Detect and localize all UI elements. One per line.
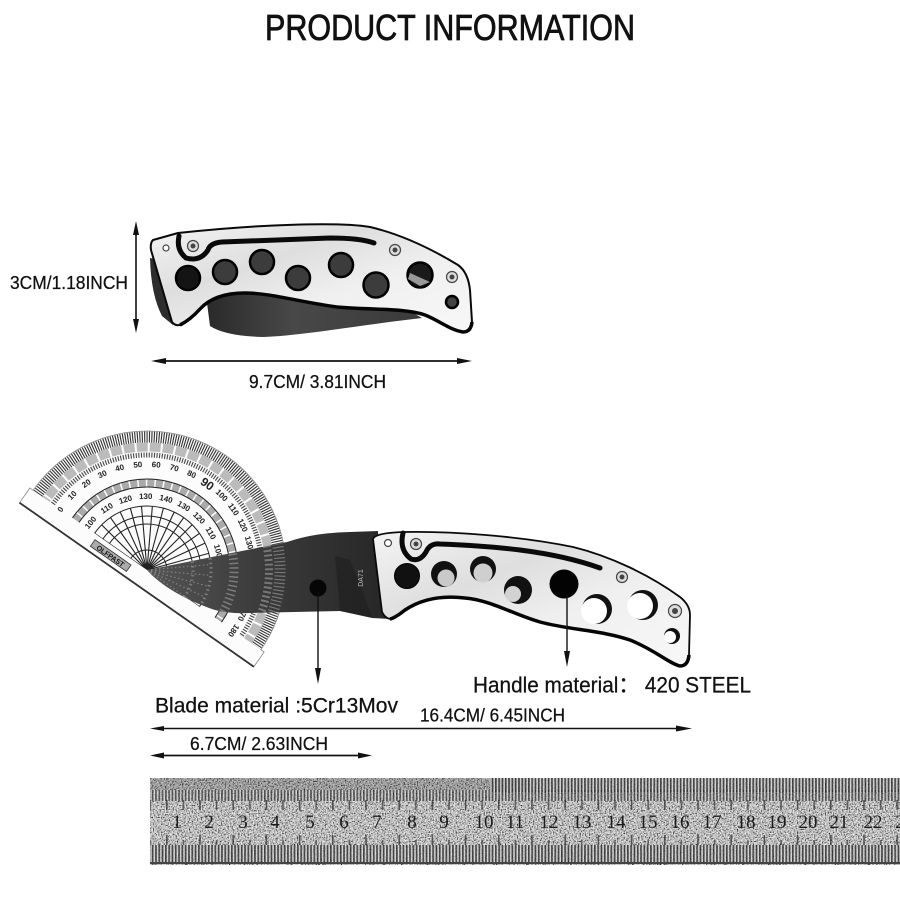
ruler bottom edge — [150, 862, 900, 864]
protractor outer numbers: 110 — [226, 502, 241, 518]
protractor body — [20, 374, 344, 667]
protractor outer numbers: 30 — [96, 468, 109, 480]
ruler numbers: 16 — [670, 812, 690, 833]
ruler center light tint — [150, 800, 900, 844]
folded blade spine sliver — [150, 258, 178, 325]
protractor outer numbers: 70 — [169, 463, 180, 474]
blade material label: Blade material :5Cr13Mov — [155, 694, 398, 718]
ruler numbers: 9 — [439, 812, 449, 833]
ruler numbers: 15 — [638, 812, 658, 833]
ruler numbers: 17 — [702, 812, 722, 833]
protractor brand label: OLFPAST — [95, 545, 126, 569]
opened handle lower black edge — [390, 597, 689, 666]
opened handle slot — [402, 533, 600, 568]
ruler centimetre marks top — [150, 800, 900, 810]
ruler numbers: 1 — [172, 812, 182, 833]
protractor outer numbers: 120 — [236, 517, 250, 534]
protractor inner numbers: 110 — [204, 525, 218, 542]
ruler numbers: 5 — [305, 812, 315, 833]
ruler noise surface — [150, 778, 900, 865]
protractor outer numbers — [53, 415, 301, 639]
width arrow — [151, 358, 472, 364]
overall length arrow — [150, 726, 692, 732]
ruler numbers: 14 — [606, 812, 626, 833]
protractor outer numbers: 0 — [56, 505, 66, 514]
protractor outer numbers: 60 — [151, 460, 162, 470]
opened handle screw heads — [414, 542, 678, 614]
handle pointer arrow — [564, 595, 570, 667]
protractor inner numbers — [83, 461, 247, 609]
opened handle screws — [384, 538, 682, 618]
protractor inner numbers: 110 — [99, 501, 115, 516]
opened blade — [147, 531, 390, 619]
ruler numbers: 20 — [798, 812, 818, 833]
ruler numbers: 8 — [407, 812, 417, 833]
protractor outer numbers: 10 — [66, 489, 79, 502]
protractor outer numbers: 100 — [214, 487, 230, 504]
ruler numbers: 12 — [540, 812, 558, 833]
blade marking: DA71 — [358, 569, 365, 587]
protractor showing through blade — [147, 543, 286, 613]
protractor inner numbers: 120 — [191, 510, 207, 526]
ruler numbers: 2 — [204, 812, 214, 833]
folded handle holes — [176, 250, 458, 308]
title: PRODUCT INFORMATION — [265, 7, 635, 48]
protractor outer numbers: 130 — [243, 535, 255, 551]
protractor outer numbers: 90 — [198, 474, 217, 494]
folded handle reflection — [408, 273, 430, 286]
protractor inner numbers: 100 — [83, 514, 99, 531]
protractor inner numbers: 130 — [139, 492, 153, 501]
middle scale ring — [72, 480, 236, 622]
ruler top shading — [150, 778, 530, 790]
ruler numbers: 6 — [339, 812, 349, 833]
folded handle slot — [178, 236, 374, 259]
ruler numbers: 3 — [238, 812, 248, 833]
handle material label: Handle material： 420 STEEL — [473, 672, 751, 698]
protractor outer numbers: 20 — [80, 477, 93, 490]
overall length label: 16.4CM/ 6.45INCH — [420, 704, 565, 726]
ruler centimetre marks bottom — [150, 835, 900, 845]
ruler numbers: 10 — [474, 812, 494, 833]
blade length label: 6.7CM/ 2.63INCH — [190, 734, 328, 754]
opened knife illustration — [147, 530, 691, 668]
height label: 3CM/1.18INCH — [10, 273, 128, 293]
protractor inner numbers: 100 — [212, 543, 224, 559]
ruler numbers: 13 — [572, 812, 592, 833]
blade pointer arrow — [310, 580, 326, 684]
protractor — [19, 430, 284, 668]
protractor inner numbers: 90 — [216, 566, 225, 575]
folded knife illustration — [150, 224, 472, 337]
folded handle screws — [163, 240, 458, 282]
protractor inner numbers: 120 — [118, 493, 134, 506]
protractor outer numbers: 40 — [114, 462, 126, 474]
protractor inner numbers: 140 — [158, 493, 174, 505]
width label: 9.7CM/ 3.81INCH — [249, 372, 386, 392]
ruler numbers: 22 — [864, 812, 882, 833]
ruler numbers: 4 — [270, 812, 280, 833]
ruler numbers: 18 — [736, 812, 756, 833]
folded handle lower black edge — [180, 293, 472, 332]
ruler numbers — [172, 812, 900, 833]
protractor brand label — [90, 540, 131, 572]
ruler right top ticks — [490, 778, 900, 792]
ruler numbers: 21 — [830, 812, 848, 833]
opened handle holes — [431, 556, 680, 644]
ruler upper millimetre ticks — [150, 790, 900, 801]
protractor outer numbers: 170 — [235, 607, 250, 623]
blade length arrow — [150, 752, 372, 758]
protractor outer numbers: 180 — [226, 622, 241, 639]
ruler numbers: 7 — [372, 812, 382, 833]
steel ruler — [150, 778, 900, 865]
tick block band — [42, 442, 272, 643]
ruler lower millimetre ticks — [150, 845, 900, 862]
height arrow — [133, 221, 139, 333]
opened handle pivot — [394, 564, 420, 588]
protractor inner numbers: 130 — [176, 499, 192, 514]
protractor outer numbers: 80 — [186, 468, 198, 481]
protractor spokes — [94, 506, 208, 607]
inner arcs — [72, 478, 237, 622]
folded handle — [151, 224, 472, 332]
protractor base edge — [20, 503, 254, 667]
opened handle — [373, 532, 690, 666]
protractor outer numbers: 50 — [133, 460, 143, 470]
ruler numbers: 19 — [768, 812, 786, 833]
folded handle screw heads — [190, 244, 454, 280]
folded blade — [207, 293, 422, 337]
ruler numbers: 11 — [506, 812, 524, 833]
inner tick band — [51, 452, 262, 638]
outer tick band — [34, 432, 283, 650]
blade bevel shadow — [335, 556, 372, 617]
